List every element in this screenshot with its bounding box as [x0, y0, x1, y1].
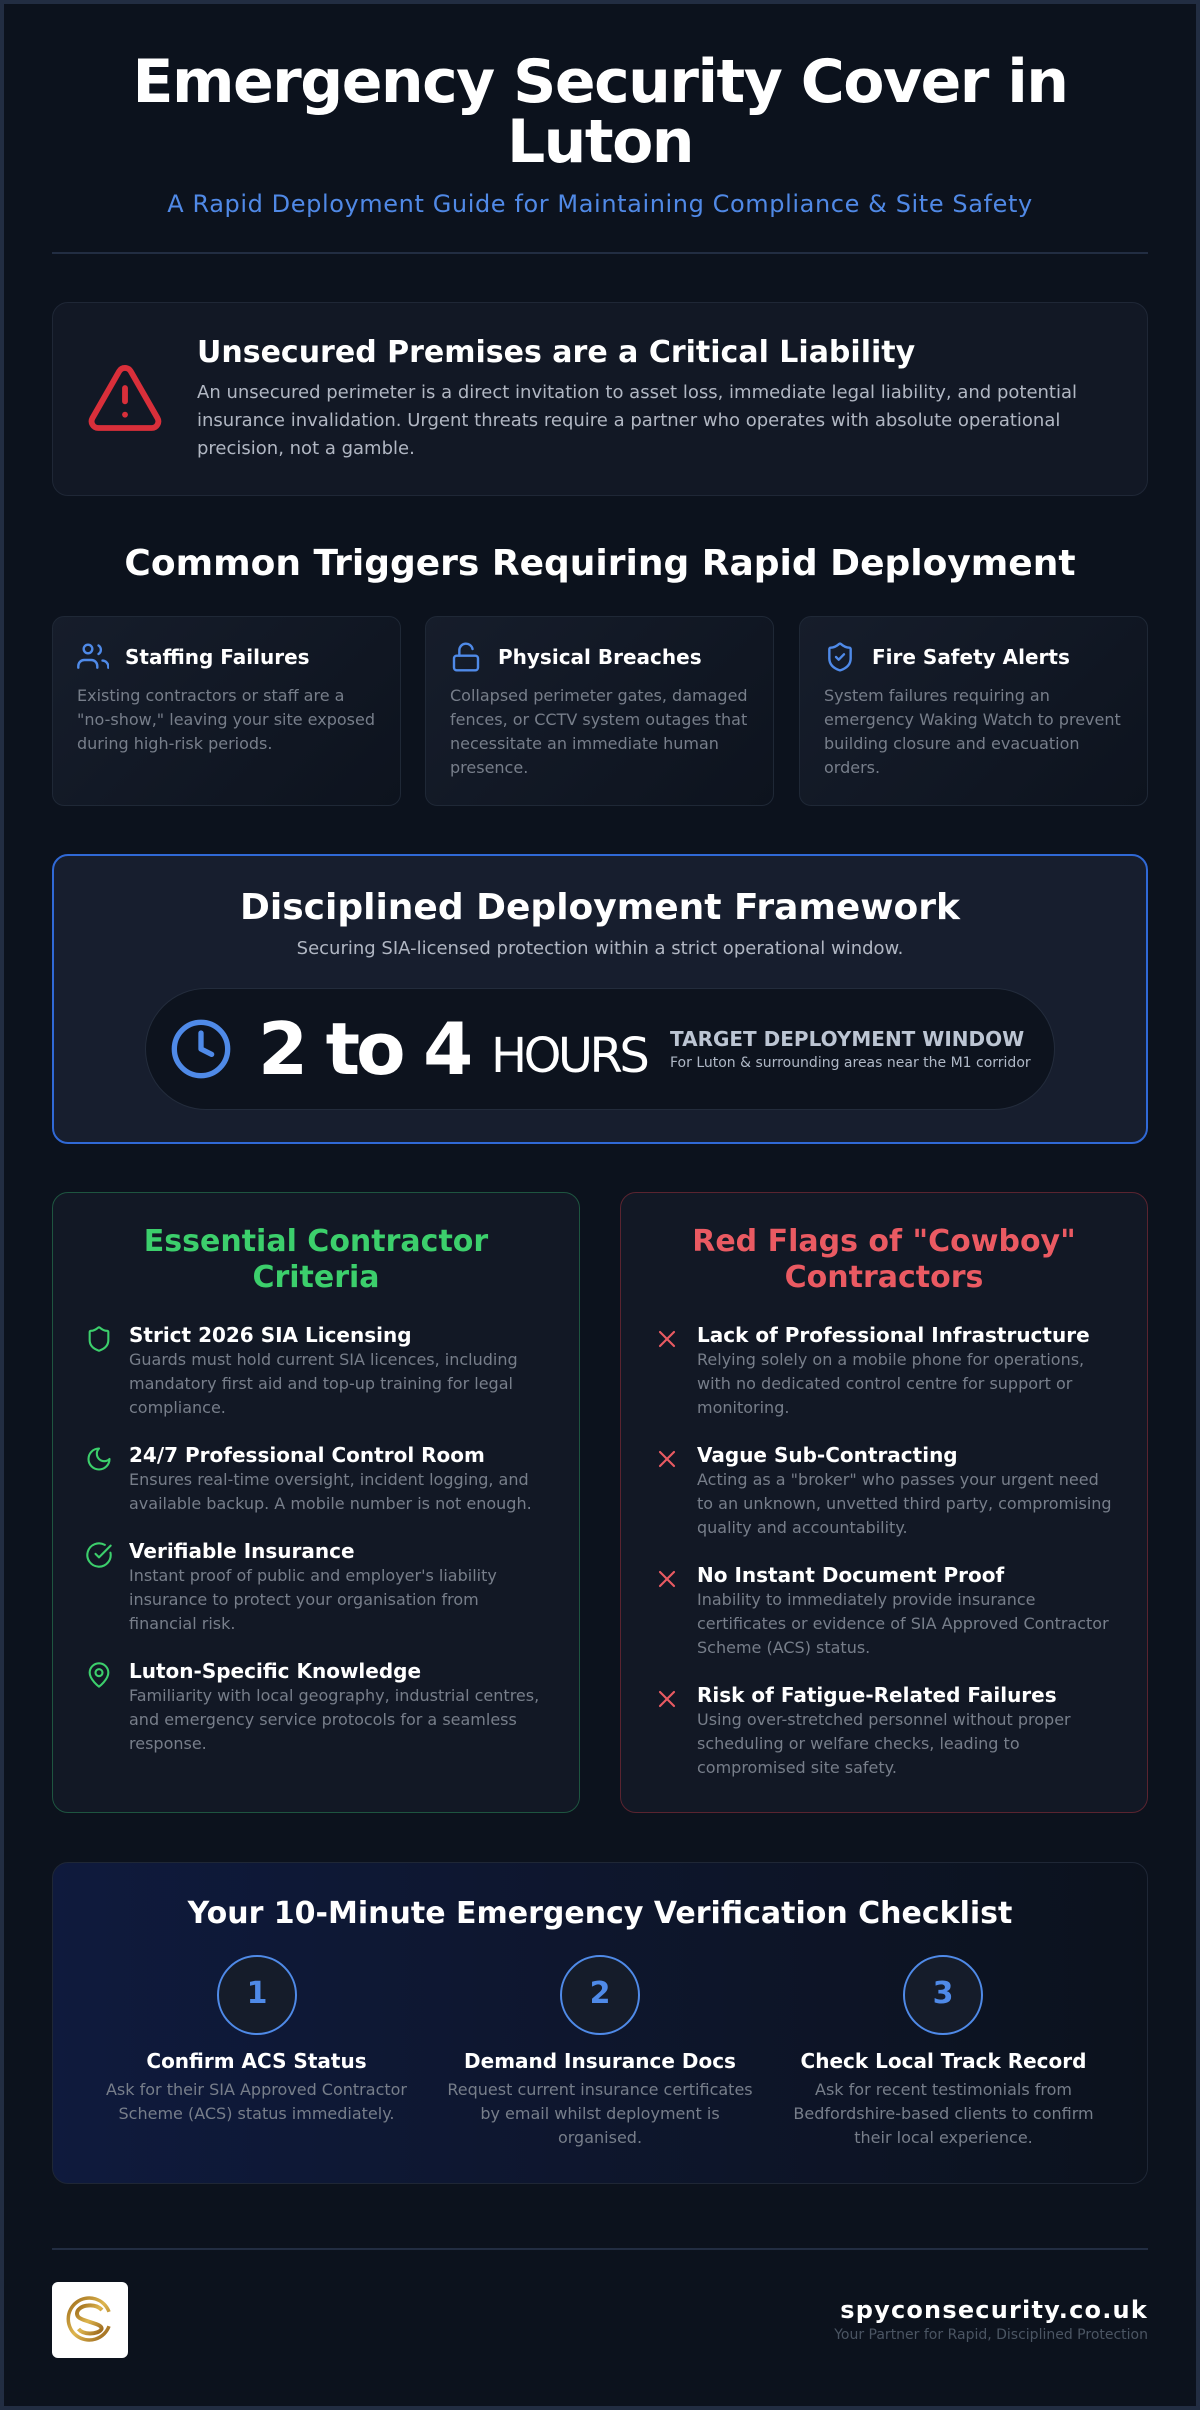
item text: financial risk. — [129, 1614, 235, 1633]
card text: emergency Waking Watch to prevent — [824, 710, 1121, 729]
heading: common triggers: Common Triggers Requiring Rapid Deployment — [124, 542, 1076, 584]
icon: users — [77, 644, 109, 669]
heading: criteria — [144, 1224, 488, 1295]
item text: Scheme (ACS) status. — [697, 1638, 870, 1657]
heading: critical liability: Unsecured Premises are a Critical Liability — [197, 335, 915, 370]
step 3 number — [903, 1955, 983, 2035]
item text: Instant proof of public and employer's liability — [129, 1566, 497, 1585]
item text: Guards must hold current SIA licences, including — [129, 1350, 518, 1369]
item title: Risk of Fatigue-Related Failures — [697, 1683, 1057, 1707]
item text: mandatory first aid and top-up training for legal — [129, 1374, 513, 1393]
item text — [129, 1350, 518, 1417]
step 3 text: Bedfordshire-based clients to confirm — [793, 2104, 1094, 2123]
card text — [824, 686, 1121, 777]
item text: Ensures real-time oversight, incident logging, and — [129, 1470, 529, 1489]
item text — [697, 1590, 1109, 1657]
step 2 text: organised. — [558, 2128, 642, 2147]
item text: available backup. A mobile number is not enough. — [129, 1494, 532, 1513]
icon: map pin — [88, 1662, 110, 1688]
step 1 title: Confirm ACS Status — [146, 2049, 367, 2073]
card text: fences, or CCTV system outages that — [450, 710, 747, 729]
icon: open lock — [452, 642, 480, 672]
title: Luton — [507, 107, 693, 177]
item text — [129, 1686, 539, 1753]
step 2 text: Request current insurance certificates — [447, 2080, 753, 2099]
text: framework subtitle: Securing SIA-licensed protection within a strict operational window. — [297, 938, 903, 959]
step 1 text: Scheme (ACS) status immediately. — [119, 2104, 394, 2123]
item text: insurance to protect your organisation from — [129, 1590, 479, 1609]
logo — [52, 2282, 128, 2358]
step 1 text: Ask for their SIA Approved Contractor — [106, 2080, 407, 2099]
card title: Staffing Failures — [125, 645, 310, 669]
item title: Vague Sub-Contracting — [697, 1443, 958, 1467]
step 1 number — [217, 1955, 297, 2035]
panel: red flags — [620, 1192, 1148, 1813]
item text: response. — [129, 1734, 207, 1753]
item text — [697, 1710, 1071, 1777]
panel: physical breaches — [425, 616, 774, 806]
criterion: insurance — [86, 1539, 497, 1633]
text: critical liability: precision, not a gamble. — [197, 438, 415, 458]
item title: Strict 2026 SIA Licensing — [129, 1323, 412, 1347]
item text: monitoring. — [697, 1398, 789, 1417]
icon: cross — [658, 1330, 676, 1348]
step 3 number: 3 — [933, 1976, 953, 2011]
item text: scheduling or welfare checks, leading to — [697, 1734, 1020, 1753]
icon: cross — [658, 1690, 676, 1708]
item text: compliance. — [129, 1398, 226, 1417]
icon: warning triangle — [88, 365, 162, 431]
card text — [450, 686, 748, 777]
item text — [697, 1350, 1084, 1417]
heading: criteria: Criteria — [252, 1260, 380, 1295]
card text: building closure and evacuation — [824, 734, 1080, 753]
item text: Familiarity with local geography, industrial centres, — [129, 1686, 539, 1705]
panel: critical liability warning — [52, 302, 1148, 496]
step 1 text — [106, 2080, 407, 2123]
unit: hours: HOURS — [491, 1028, 646, 1084]
flag: document proof — [658, 1563, 1109, 1657]
subtitle: A Rapid Deployment Guide for Maintaining Compliance & Site Safety — [167, 190, 1033, 218]
icon: cross — [658, 1450, 676, 1468]
card text — [77, 686, 375, 753]
text: critical liability — [197, 382, 1077, 458]
item text — [129, 1566, 497, 1633]
step 2 text: by email whilst deployment is — [480, 2104, 720, 2123]
heading: red flags — [692, 1224, 1076, 1295]
card text: orders. — [824, 758, 880, 777]
item title: 24/7 Professional Control Room — [129, 1443, 485, 1467]
card text: Existing contractors or staff are a — [77, 686, 344, 705]
item title: No Instant Document Proof — [697, 1563, 1004, 1587]
step 2 number: 2 — [590, 1976, 610, 2011]
item text: with no dedicated control centre for support or — [697, 1374, 1072, 1393]
big number: 2 to 4 — [258, 1007, 469, 1091]
item text: quality and accountability. — [697, 1518, 908, 1537]
label: area note: For Luton & surrounding areas near the M1 corridor — [670, 1055, 1031, 1071]
item text: to an unknown, unvetted third party, compromising — [697, 1494, 1112, 1513]
flag: sub-contracting — [658, 1443, 1112, 1537]
icon: moon — [87, 1448, 110, 1470]
heading: checklist: Your 10-Minute Emergency Verification Checklist — [188, 1896, 1012, 1930]
item title: Luton-Specific Knowledge — [129, 1659, 421, 1683]
label: target deployment window: TARGET DEPLOYMENT WINDOW — [670, 1027, 1024, 1051]
footer website: spyconsecurity.co.uk — [840, 2296, 1148, 2324]
card text: necessitate an immediate human — [450, 734, 719, 753]
panel: fire safety alerts — [799, 616, 1148, 806]
step 3 text — [793, 2080, 1094, 2147]
item text: Inability to immediately provide insurance — [697, 1590, 1036, 1609]
card text: Collapsed perimeter gates, damaged — [450, 686, 748, 705]
step 3 title: Check Local Track Record — [801, 2049, 1086, 2073]
panel: verification checklist — [52, 1862, 1148, 2184]
text: critical liability: An unsecured perimeter is a direct invitation to asset loss, immediate legal liability, and potential — [197, 382, 1077, 402]
icon: shield check — [828, 642, 852, 672]
item text: compromised site safety. — [697, 1758, 897, 1777]
title: Emergency Security Cover in — [132, 47, 1068, 117]
criterion: licensing — [88, 1323, 518, 1417]
step 1 number: 1 — [247, 1976, 267, 2011]
card title: Fire Safety Alerts — [872, 645, 1070, 669]
panel: deployment window pill — [145, 988, 1055, 1110]
card text: "no-show," leaving your site exposed — [77, 710, 375, 729]
card text: presence. — [450, 758, 528, 777]
icon: clock — [172, 1020, 230, 1078]
step 3 text: Ask for recent testimonials from — [815, 2080, 1072, 2099]
flag: infrastructure — [658, 1323, 1090, 1417]
item text: Using over-stretched personnel without proper — [697, 1710, 1071, 1729]
card text: during high-risk periods. — [77, 734, 272, 753]
card text: System failures requiring an — [824, 686, 1050, 705]
item text — [129, 1470, 532, 1513]
step 3 text: their local experience. — [854, 2128, 1033, 2147]
icon: circle check — [86, 1542, 112, 1568]
item title: Verifiable Insurance — [129, 1539, 355, 1563]
item text: certificates or evidence of SIA Approved Contractor — [697, 1614, 1109, 1633]
item text: Acting as a "broker" who passes your urgent need — [697, 1470, 1099, 1489]
item title: Lack of Professional Infrastructure — [697, 1323, 1090, 1347]
icon: cross — [658, 1570, 676, 1588]
criterion: local knowledge — [88, 1659, 539, 1753]
footer tagline: Your Partner for Rapid, Disciplined Protection — [834, 2327, 1148, 2343]
criterion: control room — [87, 1443, 532, 1513]
panel: deployment framework — [52, 854, 1148, 1144]
item text — [697, 1470, 1112, 1537]
flag: fatigue — [658, 1683, 1071, 1777]
title — [132, 47, 1068, 177]
heading: deployment framework: Disciplined Deployment Framework — [240, 886, 960, 928]
panel: staffing failures — [52, 616, 401, 806]
heading: criteria: Essential Contractor — [144, 1224, 488, 1259]
heading: red flags: Red Flags of "Cowboy" — [692, 1224, 1076, 1259]
text: critical liability: insurance invalidation. Urgent threats require a partner who operates with absolute operational — [197, 410, 1060, 430]
step 2 title: Demand Insurance Docs — [464, 2049, 736, 2073]
card title: Physical Breaches — [498, 645, 702, 669]
step 2 text — [447, 2080, 753, 2147]
icon: shield — [88, 1326, 110, 1352]
heading: red flags: Contractors — [785, 1260, 983, 1295]
step 2 number — [560, 1955, 640, 2035]
panel: essential contractor criteria — [52, 1192, 580, 1813]
item text: and emergency service protocols for a seamless — [129, 1710, 517, 1729]
item text: Relying solely on a mobile phone for operations, — [697, 1350, 1084, 1369]
